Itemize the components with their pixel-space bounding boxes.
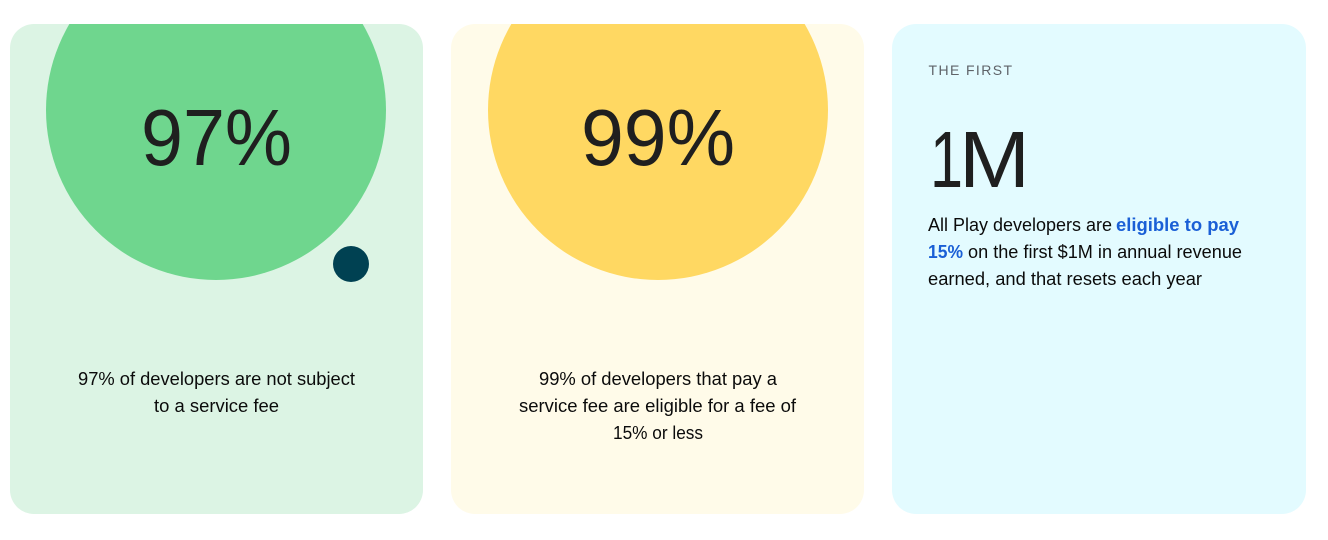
stat: 1M [930, 115, 1030, 204]
description: 1M: All Play developers are [928, 215, 1112, 235]
panel background: green [10, 24, 423, 514]
description: 1M: 15% [928, 242, 963, 262]
stat: 1M: M [959, 115, 1030, 204]
description: 99%: service fee are eligible for a fee of [519, 396, 797, 416]
stat: 99%: 99% [581, 93, 735, 182]
panel background: yellow [451, 24, 864, 514]
description: 99% [519, 369, 797, 443]
description: 97%: to a service fee [154, 396, 279, 416]
panel: 99% of developers [451, 0, 864, 514]
description: 1M: on the first $1M in annual revenue [968, 242, 1242, 262]
description: 1M: earned, and that resets each year [928, 269, 1202, 289]
description: 1M: eligible to pay [1116, 215, 1239, 235]
panel background: light blue [892, 24, 1306, 514]
stat: 1M: 1 [930, 115, 963, 204]
small dark teal circle [333, 246, 369, 282]
eyebrow label: THE FIRST [928, 62, 1012, 78]
description: 1M [928, 215, 1242, 289]
description: 99%: 15% or less [613, 423, 703, 443]
panel: the first 1M [892, 24, 1306, 514]
chart: large yellow circle [488, 0, 828, 280]
chart: large green circle [46, 0, 386, 280]
stat: 97%: 97% [141, 93, 292, 182]
description: 97% [78, 369, 355, 416]
description: 99%: 99% of developers that pay a [539, 369, 778, 389]
panel: 97% of developers [10, 0, 423, 514]
description: 97%: 97% of developers are not subject [78, 369, 355, 389]
